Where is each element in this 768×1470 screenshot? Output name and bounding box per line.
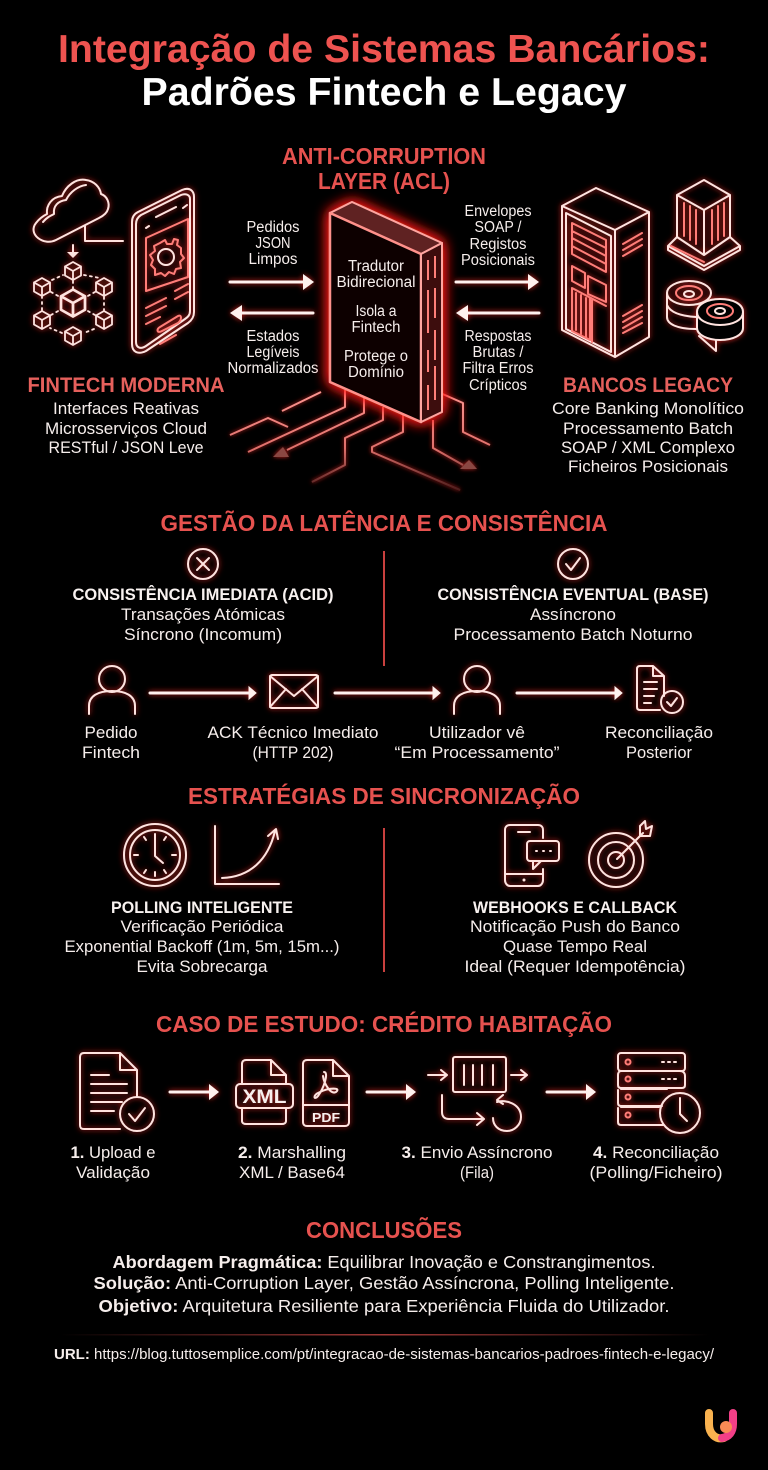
flow labels: 3. Envio Assíncrono: [402, 1143, 552, 1162]
logo: [709, 1413, 733, 1438]
flow labels: XML / Base64: [239, 1163, 345, 1182]
arrow labels left: estados: Estados: [246, 328, 300, 345]
icon: target: [589, 821, 652, 887]
text: [438, 585, 708, 644]
fintech features: Microsserviços Cloud: [45, 419, 207, 438]
icon: growth curve: [215, 826, 279, 884]
fintech features: Interfaces Reativas: [53, 399, 199, 418]
flow labels: (Polling/Ficheiro): [590, 1163, 722, 1182]
icon: storage tapes: [667, 281, 743, 351]
arrow: from bank: [456, 305, 539, 321]
flow labels: (HTTP 202): [252, 743, 334, 762]
panel: ACL block: [330, 202, 442, 422]
icon: bank building: [668, 180, 740, 270]
icon: xml and pdf: PDF: [312, 1110, 340, 1125]
arrow labels right: envelopes: SOAP /: [474, 219, 522, 236]
flow labels: Utilizador vê: [429, 723, 525, 742]
icon: document check: [637, 666, 683, 713]
flow labels: “Em Processamento”: [394, 743, 560, 762]
block text: Tradutor: [348, 258, 404, 275]
text: CONSISTÊNCIA IMEDIATA (ACID): [72, 585, 334, 604]
flow labels: 2. Marshalling: [238, 1143, 346, 1162]
arrow labels right: envelopes: Envelopes: [464, 203, 532, 220]
arrow labels left: pedidos: [246, 219, 300, 268]
heading: anti-corruption layer: LAYER (ACL): [318, 168, 450, 194]
icon: xml and pdf: [236, 1060, 349, 1126]
panel: consistência eventual: [438, 549, 708, 644]
arrow: from ACL: [230, 305, 313, 321]
flow labels: Posterior: [626, 743, 692, 762]
block text: Bidirecional: [336, 274, 416, 291]
title: [58, 28, 710, 114]
heading: anti-corruption layer: [282, 143, 486, 194]
title: Padrões Fintech e Legacy: [142, 71, 627, 114]
arrow labels left: estados: [228, 328, 319, 377]
flow: request process: [82, 666, 713, 762]
arrow labels right: respostas: [462, 328, 534, 394]
arrow: [150, 687, 256, 699]
icon: user: [454, 666, 500, 714]
flow labels: ACK Técnico Imediato: [208, 723, 378, 742]
flow labels: Reconciliação: [605, 723, 713, 742]
icon: user: [89, 666, 135, 714]
panel: webhooks: [464, 821, 686, 976]
panel: consistência imediata: [72, 549, 334, 644]
icon: check circle: [558, 549, 588, 579]
arrow: to bank: [456, 274, 539, 290]
conclusions text: [94, 1252, 674, 1316]
icon: x circle: [188, 549, 218, 579]
icon: microservices network: [34, 262, 112, 345]
arrow labels left: pedidos: Pedidos: [246, 219, 300, 236]
icon: clock: [124, 824, 186, 886]
source url: URL: https://blog.tuttosemplice.com/pt/integracao-de-sistemas-bancarios-padroes-fintech-e-legacy/: [54, 1347, 715, 1363]
heading: gestão da latência: GESTÃO DA LATÊNCIA E CONSISTÊNCIA: [160, 509, 608, 536]
block text: [336, 258, 416, 381]
panel: fintech moderna: [28, 180, 224, 457]
text: Notificação Push do Banco: [470, 917, 680, 936]
bancos features: Processamento Batch: [563, 419, 733, 438]
text: CONSISTÊNCIA EVENTUAL (BASE): [438, 585, 708, 604]
text: [464, 898, 686, 976]
circuit traces: [230, 390, 490, 490]
bancos features: Ficheiros Posicionais: [568, 457, 728, 476]
icon: smartphone: [132, 189, 194, 353]
title: Integração de Sistemas Bancários:: [58, 28, 710, 71]
arrow labels left: estados: Normalizados: [228, 360, 319, 377]
icon: server with clock: [618, 1053, 700, 1133]
icon: upload document: [80, 1053, 154, 1131]
arrow labels right: respostas: Brutas /: [472, 344, 524, 361]
arrow labels right: respostas: Filtra Erros: [462, 360, 534, 377]
bancos features: SOAP / XML Complexo: [561, 438, 735, 457]
flow labels: 1. Upload e: [70, 1143, 156, 1162]
bancos heading: BANCOS LEGACY: [563, 374, 733, 397]
conclusions text: Solução: Anti-Corruption Layer, Gestão Assíncrona, Polling Inteligente.: [94, 1273, 674, 1293]
flow labels: 4. Reconciliação: [593, 1143, 719, 1162]
flow labels: Pedido: [84, 723, 138, 742]
conclusions text: Objetivo: Arquitetura Resiliente para Experiência Fluida do Utilizador.: [98, 1296, 670, 1316]
fintech heading: FINTECH MODERNA: [28, 374, 224, 397]
text: Processamento Batch Noturno: [454, 625, 692, 644]
arrow: [335, 687, 440, 699]
flow: crédito habitação: [70, 1053, 722, 1182]
flow labels: (Fila): [460, 1163, 494, 1182]
heading: anti-corruption layer: ANTI-CORRUPTION: [282, 143, 486, 169]
flow labels: Validação: [76, 1163, 150, 1182]
arrow labels right: envelopes: Registos: [470, 236, 527, 253]
arrow: [517, 687, 622, 699]
flow labels: [82, 723, 713, 762]
text: POLLING INTELIGENTE: [111, 898, 293, 917]
text: Verificação Periódica: [120, 917, 284, 936]
icon: envelope: [270, 675, 318, 708]
text: [72, 585, 334, 644]
arrow labels left: pedidos: JSON: [256, 235, 290, 252]
text: [64, 898, 340, 976]
text: Exponential Backoff (1m, 5m, 15m...): [64, 937, 340, 956]
panel: polling: [64, 824, 340, 976]
heading: caso de estudo: CASO DE ESTUDO: CRÉDITO HABITAÇÃO: [156, 1010, 612, 1037]
icon: cloud: [34, 180, 123, 258]
arrow: to ACL: [230, 274, 314, 290]
text: Assíncrono: [530, 605, 616, 624]
text: Síncrono (Incomum): [124, 625, 282, 644]
arrow labels right: respostas: Crípticos: [469, 377, 527, 394]
arrow labels left: estados: Legíveis: [246, 344, 300, 361]
arrow: [170, 1084, 219, 1100]
icon: xml and pdf: XML: [242, 1087, 287, 1108]
conclusions text: Abordagem Pragmática: Equilibrar Inovação e Constrangimentos.: [112, 1252, 656, 1272]
heading: conclusões: CONCLUSÕES: [306, 1216, 462, 1243]
icon: server rack: [562, 188, 649, 357]
fintech features: RESTful / JSON Leve: [48, 438, 204, 457]
heading: estratégias: ESTRATÉGIAS DE SINCRONIZAÇÃO: [188, 782, 580, 809]
fintech features: [45, 399, 207, 457]
text: Transações Atómicas: [121, 605, 285, 624]
text: Evita Sobrecarga: [136, 957, 268, 976]
block text: Domínio: [348, 364, 404, 381]
icon: async queue: [428, 1057, 527, 1131]
block text: Fintech: [352, 319, 400, 336]
block text: Isola a: [356, 303, 397, 320]
text: WEBHOOKS E CALLBACK: [473, 898, 678, 917]
icon: phone with chat: [505, 825, 559, 886]
arrow: [367, 1084, 416, 1100]
arrow: [547, 1084, 596, 1100]
arrow labels right: envelopes: Posicionais: [461, 252, 535, 269]
block text: Protege o: [344, 348, 408, 365]
bancos features: Core Banking Monolítico: [552, 399, 744, 418]
arrow labels left: pedidos: Limpos: [248, 251, 298, 268]
arrow labels right: respostas: Respostas: [464, 328, 532, 345]
flow labels: Fintech: [82, 743, 140, 762]
block: [330, 202, 442, 422]
text: Ideal (Requer Idempotência): [464, 957, 686, 976]
text: Quase Tempo Real: [503, 937, 647, 956]
panel: bancos legacy: [552, 180, 744, 476]
arrow labels right: envelopes: [461, 203, 535, 269]
flow labels: [70, 1143, 722, 1182]
bancos features: [552, 399, 744, 476]
